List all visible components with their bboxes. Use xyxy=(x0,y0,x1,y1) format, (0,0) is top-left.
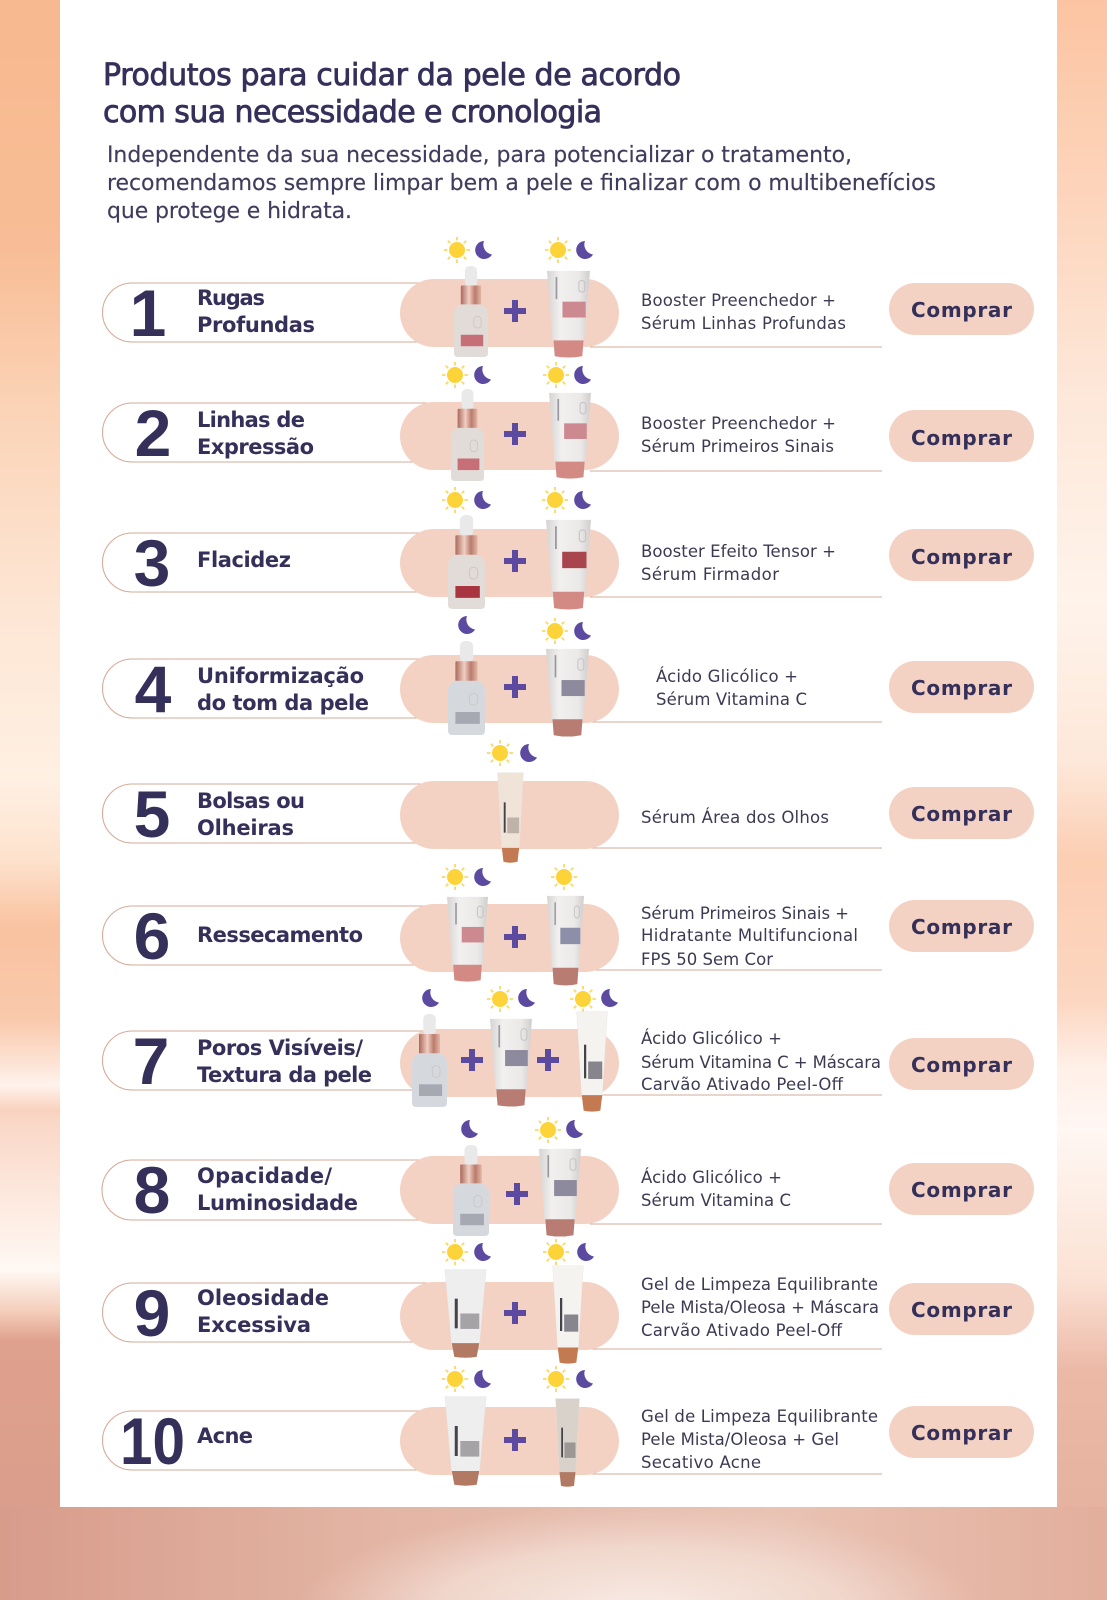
row 9: oleosidade xyxy=(103,1239,1034,1364)
buy button xyxy=(889,661,1034,713)
number: 10 xyxy=(120,1404,185,1478)
plus xyxy=(461,1049,483,1071)
description: Ácido Glicólico + xyxy=(641,1168,782,1187)
number: 5 xyxy=(134,777,170,851)
buy button xyxy=(889,1038,1034,1090)
buy button xyxy=(889,787,1034,839)
icons: day and night xyxy=(442,1366,593,1392)
buy button: Comprar xyxy=(911,802,1012,826)
description: Sérum Linhas Profundas xyxy=(641,314,846,333)
description xyxy=(641,1029,881,1094)
row 7: poros visiveis xyxy=(103,986,1034,1112)
description xyxy=(641,1168,791,1210)
plus xyxy=(504,676,526,698)
description: FPS 50 Sem Cor xyxy=(641,950,773,969)
label xyxy=(197,286,315,337)
background: bottom strip xyxy=(0,1507,1107,1600)
label xyxy=(197,408,314,459)
description: Sérum Vitamina C + Máscara xyxy=(641,1053,881,1072)
icons: day and night xyxy=(442,1239,594,1265)
icons: day and night xyxy=(442,864,577,890)
label xyxy=(197,1286,329,1337)
label: Flacidez xyxy=(197,548,291,572)
product: serum xyxy=(539,1149,581,1237)
label: Textura da pele xyxy=(197,1063,372,1087)
number: 8 xyxy=(134,1153,170,1227)
intro text xyxy=(107,143,936,224)
description: Booster Preenchedor + xyxy=(641,414,836,433)
label: Luminosidade xyxy=(197,1191,358,1215)
product: serum xyxy=(547,271,590,358)
intro text: recomendamos sempre limpar bem a pele e finalizar com o multibenefícios xyxy=(107,171,936,196)
product: serum xyxy=(546,520,591,610)
buy button: Comprar xyxy=(911,1421,1012,1445)
title xyxy=(103,58,681,130)
buy button: Comprar xyxy=(911,545,1012,569)
buy button xyxy=(889,900,1034,952)
row 10: acne xyxy=(103,1366,1034,1487)
description: Carvão Ativado Peel-Off xyxy=(641,1321,843,1340)
buy button: Comprar xyxy=(911,298,1012,322)
description xyxy=(641,291,846,333)
description xyxy=(641,1275,879,1340)
buy button: Comprar xyxy=(911,915,1012,939)
intro text: Independente da sua necessidade, para potencializar o tratamento, xyxy=(107,143,852,168)
label: Linhas de xyxy=(197,408,305,432)
product: acid xyxy=(412,1014,447,1107)
product: charcoal mask xyxy=(577,1012,607,1112)
description: Pele Mista/Oleosa + Gel xyxy=(641,1430,839,1449)
label xyxy=(197,1164,358,1215)
plus xyxy=(504,550,526,572)
buy button xyxy=(889,1163,1034,1215)
product: charcoal mask xyxy=(553,1266,583,1364)
label xyxy=(197,1036,372,1087)
label: Oleosidade xyxy=(197,1286,329,1310)
product: booster xyxy=(454,266,488,357)
buy button: Comprar xyxy=(911,1178,1012,1202)
buy button: Comprar xyxy=(911,426,1012,450)
description xyxy=(641,414,836,456)
number: 9 xyxy=(134,1276,170,1350)
label xyxy=(197,664,369,715)
row 2: linhas de expressao xyxy=(103,362,1034,481)
number: 1 xyxy=(130,276,166,350)
title: com sua necessidade e cronologia xyxy=(103,95,602,130)
description: Sérum Vitamina C xyxy=(656,690,807,709)
product: booster xyxy=(451,389,484,481)
plus xyxy=(506,1183,528,1205)
description: Sérum Firmador xyxy=(641,565,779,584)
plus xyxy=(504,1429,526,1451)
description: Sérum Vitamina C xyxy=(641,1191,791,1210)
product: serum xyxy=(490,1019,532,1107)
description: Secativo Acne xyxy=(641,1453,761,1472)
icons: day and night xyxy=(487,740,537,766)
label: Acne xyxy=(197,1424,253,1448)
row 5: bolsas ou olheiras xyxy=(103,740,1034,863)
label: Excessiva xyxy=(197,1313,311,1337)
product: acid xyxy=(453,1145,489,1236)
buy button: Comprar xyxy=(911,1053,1012,1077)
description xyxy=(641,904,858,969)
label: Profundas xyxy=(197,313,315,337)
description: Ácido Glicólico + xyxy=(641,1029,782,1048)
product: cleansing gel xyxy=(445,1270,486,1358)
intro text: que protege e hidrata. xyxy=(107,199,352,224)
icons: day and night xyxy=(442,362,591,388)
description xyxy=(656,667,807,709)
label: do tom da pele xyxy=(197,691,369,715)
row 3: flacidez xyxy=(103,487,1034,610)
number: 3 xyxy=(134,526,170,600)
number: 7 xyxy=(133,1024,169,1098)
description xyxy=(641,1407,878,1472)
plus xyxy=(504,300,526,322)
description: Pele Mista/Oleosa + Máscara xyxy=(641,1298,879,1317)
product: drying gel xyxy=(556,1399,580,1487)
row 6: ressecamento xyxy=(103,864,1034,986)
plus xyxy=(504,926,526,948)
product: serum xyxy=(546,649,589,737)
background: right strip xyxy=(1056,0,1107,1600)
label: Ressecamento xyxy=(197,923,363,947)
buy button xyxy=(889,283,1034,335)
plus xyxy=(504,423,526,445)
label: Poros Visíveis/ xyxy=(197,1036,363,1060)
plus xyxy=(504,1302,526,1324)
row 1: rugas profundas xyxy=(103,237,1034,358)
title: Produtos para cuidar da pele de acordo xyxy=(103,58,681,93)
description xyxy=(641,542,836,584)
buy button xyxy=(889,410,1034,462)
icons: day and night xyxy=(442,487,591,513)
product: serum xyxy=(549,393,591,479)
icons: day and night xyxy=(444,237,593,263)
description: Ácido Glicólico + xyxy=(656,667,798,686)
description: Sérum Primeiros Sinais xyxy=(641,437,834,456)
buy button: Comprar xyxy=(911,676,1012,700)
icons: day and night xyxy=(461,1117,583,1143)
buy button xyxy=(889,529,1034,581)
buy button xyxy=(889,1406,1034,1458)
buy button xyxy=(889,1283,1034,1335)
label: Expressão xyxy=(197,435,314,459)
label: Uniformização xyxy=(197,664,364,688)
row 8: opacidade xyxy=(102,1117,1034,1237)
icons: day and night xyxy=(458,616,591,644)
description: Sérum Primeiros Sinais + xyxy=(641,904,849,923)
row 4: uniformizacao xyxy=(103,616,1034,737)
label: Rugas xyxy=(197,286,265,310)
description: Carvão Ativado Peel-Off xyxy=(641,1075,844,1094)
plus xyxy=(537,1049,559,1071)
label xyxy=(197,789,305,840)
description: Booster Efeito Tensor + xyxy=(641,542,836,561)
product: booster xyxy=(448,515,485,609)
description: Sérum Área dos Olhos xyxy=(641,808,829,827)
buy button: Comprar xyxy=(911,1298,1012,1322)
label: Opacidade/ xyxy=(197,1164,332,1188)
background: left strip xyxy=(0,0,60,1600)
icons: day and night xyxy=(422,986,618,1012)
description: Hidratante Multifuncional xyxy=(641,926,858,945)
product: serum xyxy=(447,897,488,982)
product: eye serum xyxy=(498,773,523,863)
product: acid xyxy=(448,641,485,735)
product: cleansing gel xyxy=(445,1397,486,1486)
number: 6 xyxy=(134,899,170,973)
product: moisturizer xyxy=(547,896,584,986)
number: 2 xyxy=(135,396,171,470)
label: Olheiras xyxy=(197,816,294,840)
label: Bolsas ou xyxy=(197,789,305,813)
description: Booster Preenchedor + xyxy=(641,291,836,310)
description: Gel de Limpeza Equilibrante xyxy=(641,1275,878,1294)
number: 4 xyxy=(135,652,172,726)
description: Gel de Limpeza Equilibrante xyxy=(641,1407,878,1426)
